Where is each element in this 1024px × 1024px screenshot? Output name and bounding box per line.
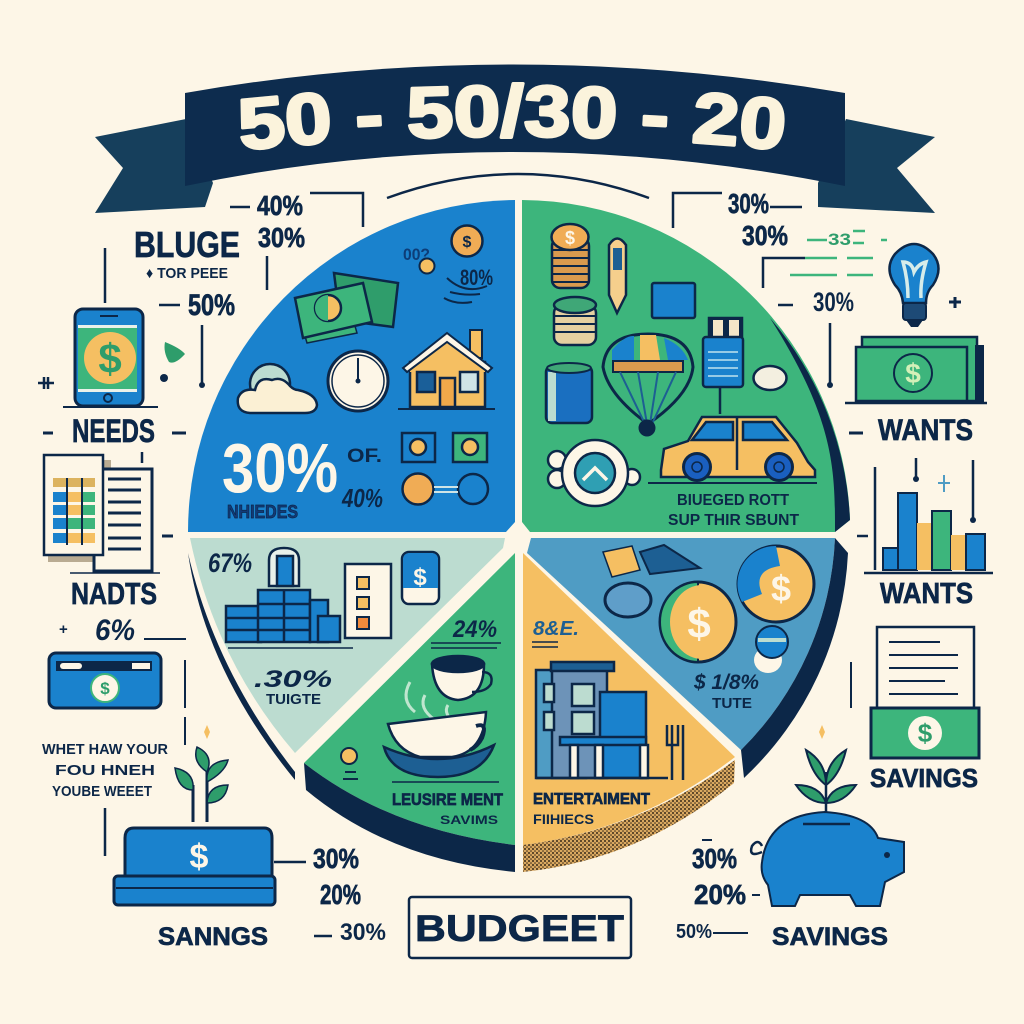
right bottom labels: 50% [676,921,712,943]
small mark [38,377,54,389]
panel: needs quadrant [188,200,515,532]
icon: bank card: $ [100,679,110,698]
icon: bowl [548,440,640,506]
text: savings: SAVIMS [440,813,498,827]
sparkle [938,475,950,492]
small dot [160,374,168,382]
icon: restaurant building [536,662,668,778]
label: 80%: 80% [460,265,493,290]
label: 6%: 6% [95,614,135,647]
pie centre [508,525,528,545]
left bottom labels [105,808,386,946]
icon: card [652,283,695,318]
icon: sofa with dollar: $ [190,838,209,876]
icon: coin: $ [463,234,472,251]
icon: saucer cup [384,712,499,782]
budget box: BUDGEET [415,908,624,949]
icon: checklist [345,564,391,638]
icon: phone dollar: $ [413,564,427,591]
right labels top: 30% [813,287,854,317]
small coin [420,258,434,274]
connector lines [230,193,363,290]
title banner [95,64,935,213]
text: 40%: 40% [257,190,303,221]
text: 30%: 30% [258,222,305,253]
icon: blue pill [754,626,788,673]
label: NADTS: NADTS [71,576,157,611]
icon: office building [226,548,353,648]
budget box [409,897,631,958]
left bottom labels: 30% [313,843,359,874]
right bottom labels [676,840,760,943]
label: SAVINGS lower: SAVINGS [772,923,888,951]
icon: cloud [238,364,317,413]
right bottom labels: 30% [692,843,737,874]
icon: pebbles [605,583,651,617]
dollar on coin: $ [565,228,575,248]
label: WANTS: WANTS [878,414,973,447]
label: NEEDS: NEEDS [72,413,155,449]
icon: car [648,417,817,483]
panel: pale tuition slice [188,538,505,780]
title text: 50 - 50/30 - 20 [240,82,785,150]
icon: phone dollar [402,552,439,604]
icon: sofa with dollar [114,828,275,905]
label: 24%: 24% [452,616,497,643]
connector lines [185,660,851,745]
icon: bank card [49,653,161,708]
icon: spreadsheet document [44,452,173,573]
icon: piggy bank [751,750,904,906]
icon: cylinder [546,363,592,423]
text: wants caption line two: SUP THIR SBUNT [668,512,799,529]
label: WANTS lower: WANTS [880,578,973,610]
needs small squares [402,433,488,504]
small mark right [949,297,961,308]
lines under 24% [431,643,501,648]
swoosh marks [444,278,487,303]
label: 00: 00? [403,245,430,264]
icon: wallet and hand [603,545,700,577]
lines under amount [532,642,558,647]
label: SANNGS: SANNGS [158,923,268,951]
panel: leisure slice [304,553,515,872]
text: fitness: FIIHIECS [533,811,594,827]
top arc line [387,174,649,198]
text: entertainment: ENTERTAIMENT [533,791,650,808]
right labels top: 33 [828,230,851,249]
icon: light bulb [890,244,938,327]
panel: wants quadrant [522,200,850,532]
label: 40%: 40% [341,483,383,513]
sparkle right [819,725,825,739]
icon: house [398,330,495,409]
icon: document and banknote [871,627,979,758]
icon: large coin [660,582,736,662]
pie chart [188,200,850,872]
icon: pie coin: $ [771,568,791,609]
right labels top: 30% [742,220,788,251]
label: OF: OF. [347,446,382,467]
icon: banknotes [295,273,398,343]
icon: phone [63,248,158,407]
text: caption block: WHET HAW YOUR [42,741,168,758]
right labels top: 30% [728,188,769,219]
icon: balloon [603,334,693,436]
icon: banknotes right: $ [905,358,921,389]
icon: large coin: $ [687,600,711,647]
label: 67%: 67% [208,548,252,578]
label: needs: NHIEDES [227,502,298,522]
label: percent: $ 1/8% [693,671,759,694]
coin connector [434,487,458,492]
small lightbulb mark [341,748,358,779]
speech bubble [754,366,786,390]
icon: banknotes right [845,337,987,403]
panel: savings slice [527,538,848,778]
bar chart [857,458,993,573]
left bottom labels: 20% [320,879,361,910]
text: leisure: LEUSIRE MENT [392,790,504,809]
heading: BLUGE: BLUGE [134,224,240,265]
label: 30%: .30% [254,666,332,693]
subheading: TOR PEEE: ♦ TOR PEEE [146,265,228,282]
label: tuition: TUIGTE [266,691,321,708]
text: caption block: FOU HNEH [55,762,155,779]
right labels top [673,188,887,388]
icon: fork [667,725,683,780]
icon: pencil [609,238,626,313]
left bottom labels: 30% [340,919,386,946]
label: 6% [59,614,186,647]
icon: steam [406,682,458,726]
label: WANTS [849,414,973,447]
icon: plant [175,747,228,822]
icon: phone: $ [98,335,122,382]
icon: clock [328,351,388,411]
sparkle left [204,725,210,739]
right bottom labels: 20% [694,879,746,910]
label: 50% with line [159,289,235,388]
text: caption block [42,741,168,800]
icon: pie coin [737,546,814,622]
icon: document and banknote: $ [918,718,933,748]
label: tute: TUTE [712,695,752,712]
label: amount: 8&E. [533,618,579,640]
left labels top [230,190,363,290]
text: caption block: YOUBE WEEET [52,783,152,800]
big percentage: 30% [222,429,338,507]
icon: coffee cup [432,656,492,700]
icon: small leaf [164,342,185,363]
label: SAVINGS upper: SAVINGS [870,763,978,793]
icon: coin [452,226,482,256]
text: wants caption: BIUEGED ROTT [677,492,789,509]
label: 50% with line: 50% [188,289,235,322]
panel: entertainment slice [523,553,735,872]
label: 6%: + [59,621,68,638]
icon: coin stacks [552,224,596,345]
icon: document [703,318,743,414]
